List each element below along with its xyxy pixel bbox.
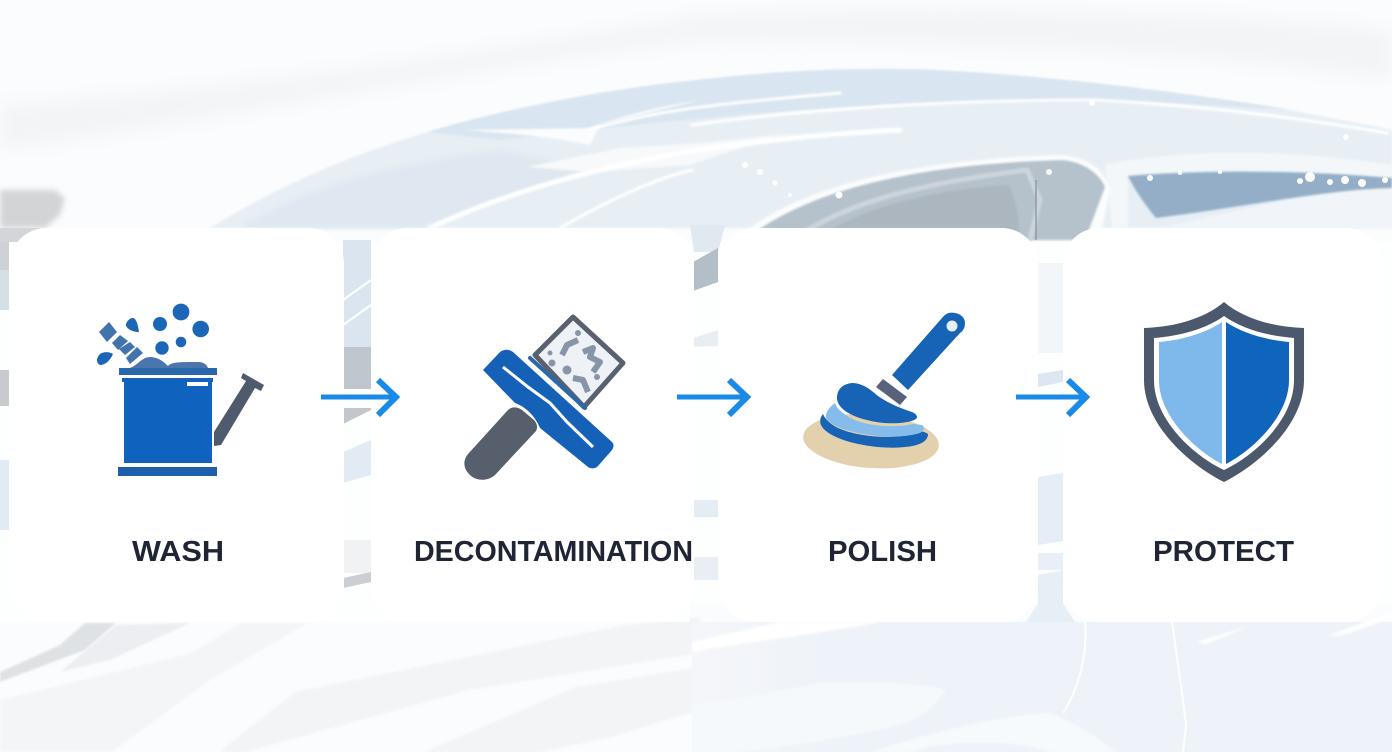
card: protect (1063, 228, 1382, 622)
arrow: wash to decontamination (321, 380, 396, 415)
icon: shield (1144, 302, 1304, 482)
icon: clay bar and applicator (464, 317, 623, 480)
icon: polisher (801, 313, 965, 473)
label: protect: PROTECT (1153, 536, 1294, 568)
label: decontamination: DECONTAMINATION (414, 536, 693, 568)
label: wash: WASH (132, 536, 224, 568)
arrow: decontamination to polish (677, 380, 747, 415)
card: decontamination (371, 228, 694, 622)
arrow: polish to protect (1016, 380, 1086, 415)
label: polish: POLISH (828, 536, 937, 568)
icon: bucket with foam and brush (97, 304, 264, 476)
card: wash (10, 228, 344, 622)
card: polish (719, 228, 1038, 622)
